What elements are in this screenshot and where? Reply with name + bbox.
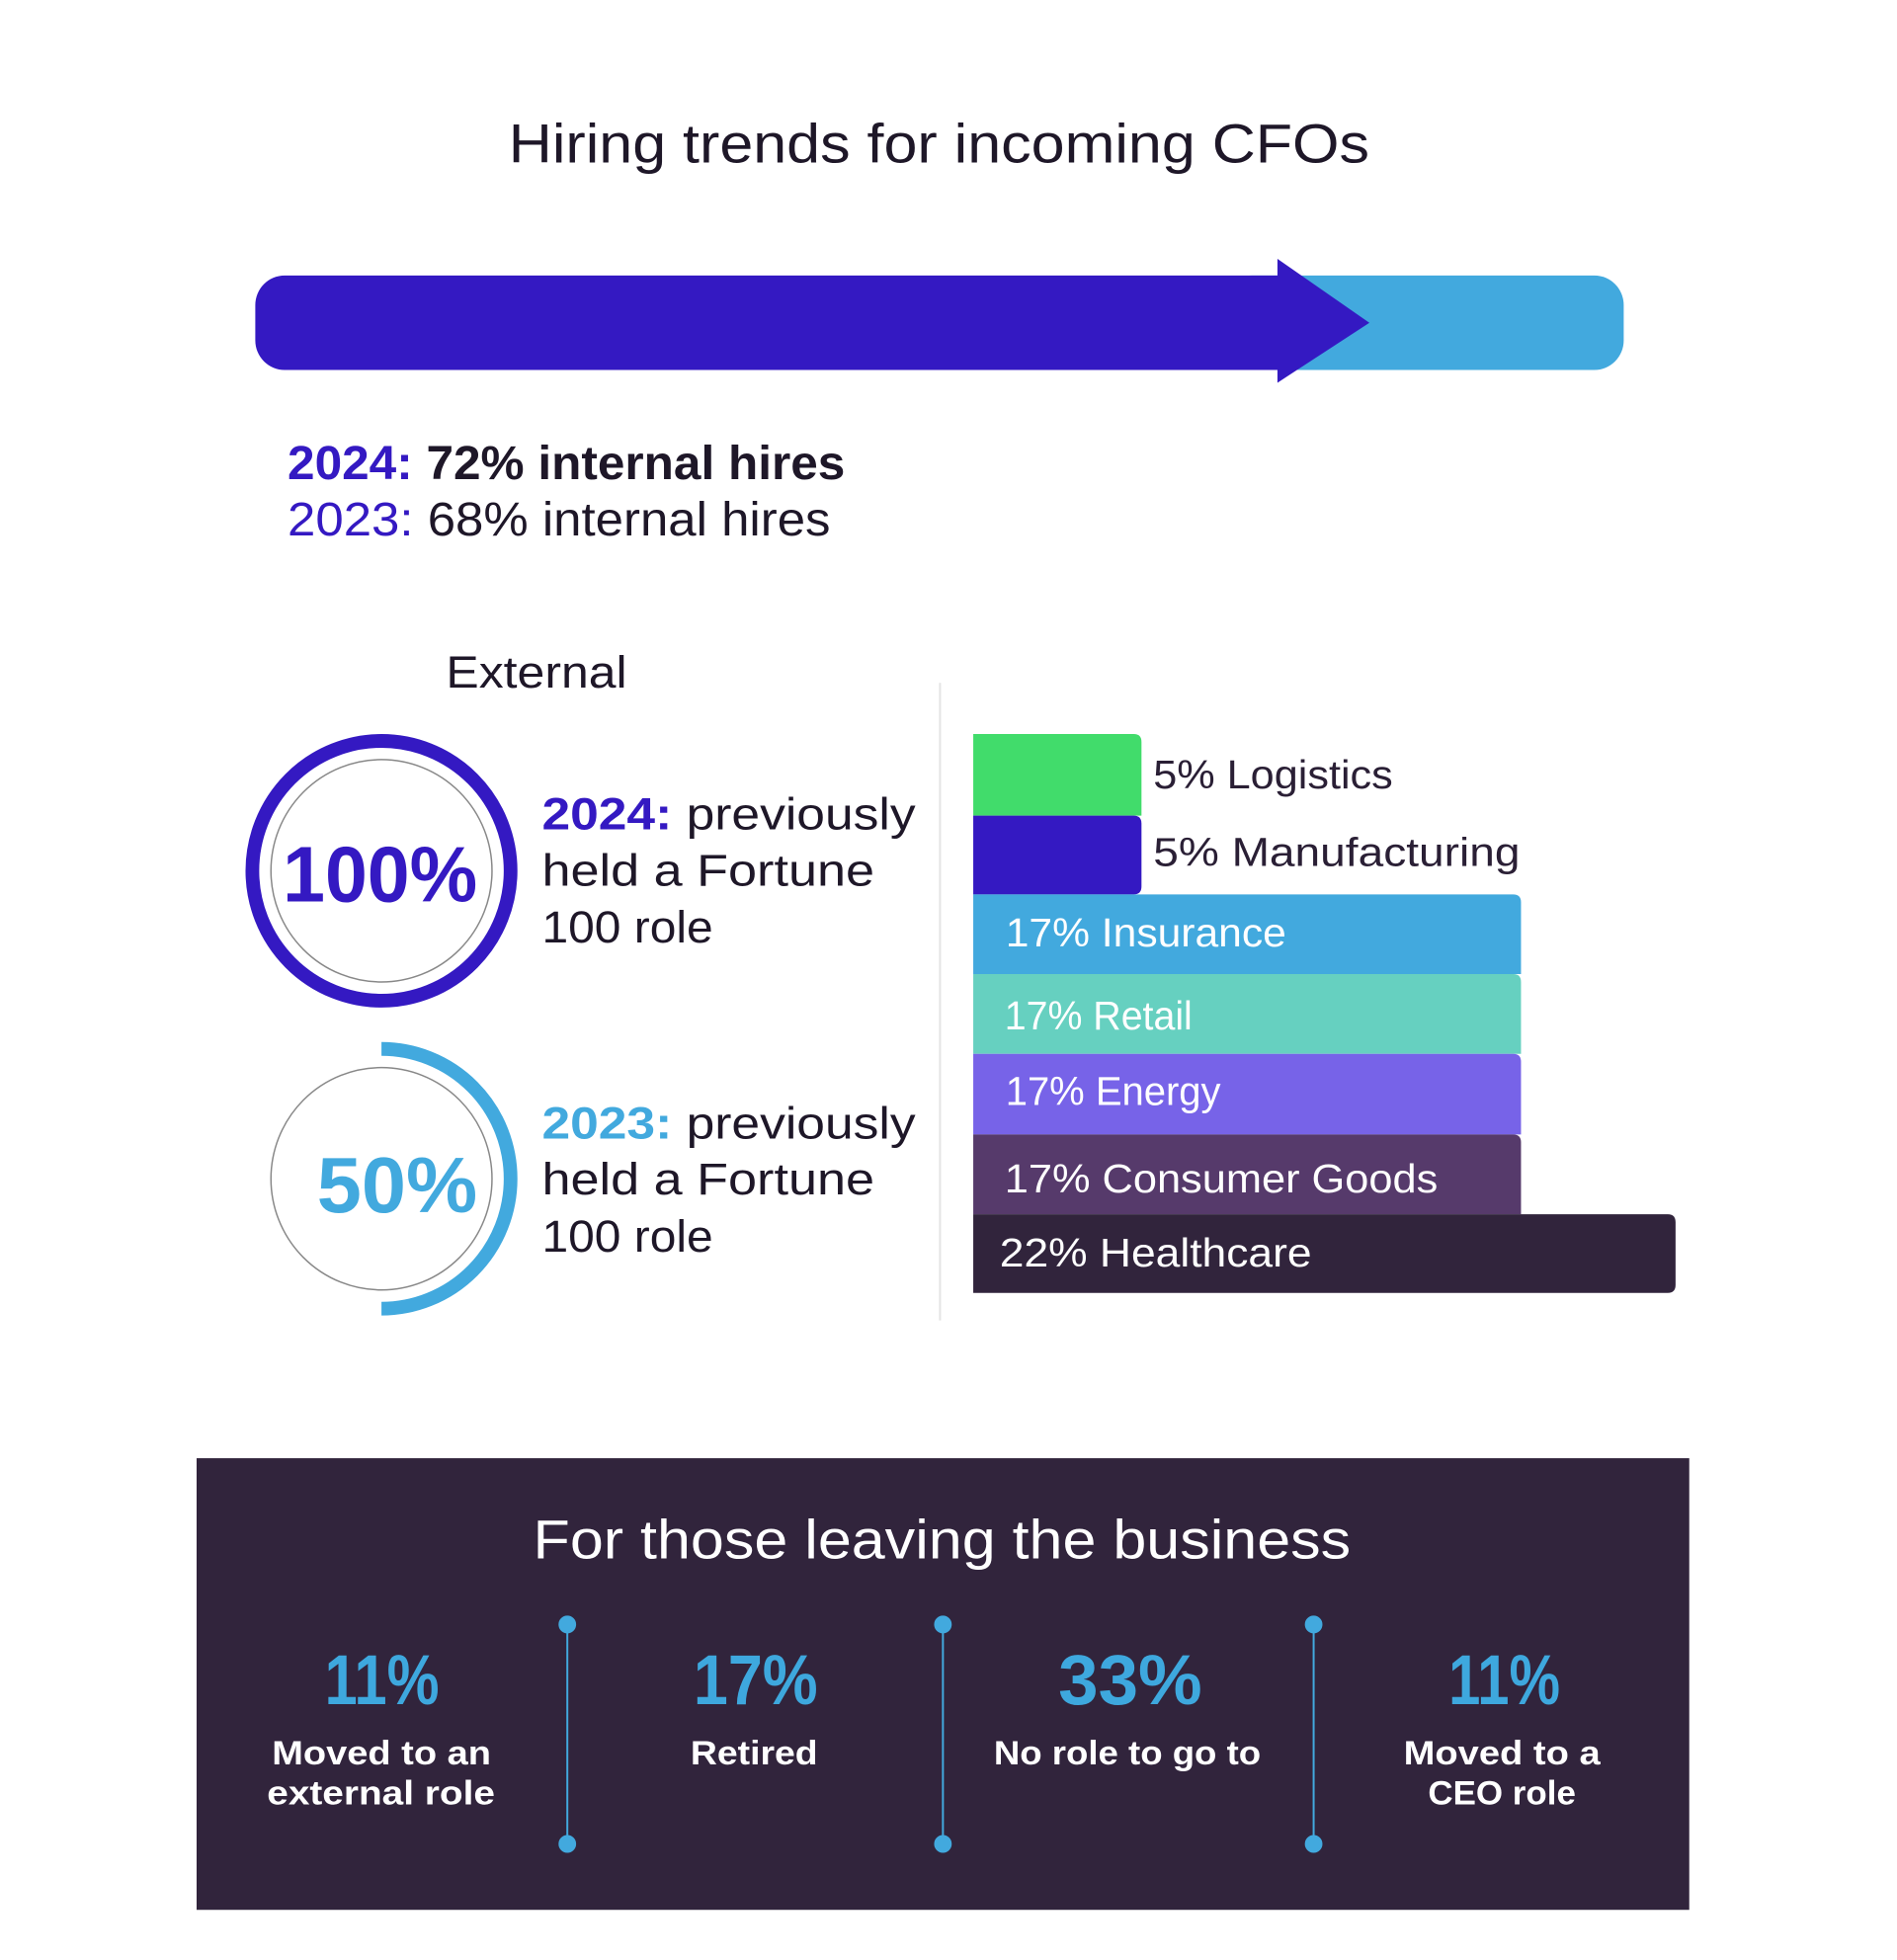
stat: no role: No role to go to [994,1735,1261,1772]
text: 2024 fortune 100 [541,789,916,952]
stat: external role: external role [267,1775,495,1813]
stat: no role [994,1641,1261,1772]
text: 2023 fortune 100: held a Fortune [541,1154,874,1204]
bar: consumer goods [973,1134,1521,1214]
stat: CEO role [1404,1641,1601,1813]
progress arrow bar [255,259,1623,382]
text: 2024 fortune 100: held a Fortune [541,845,874,895]
circle: 50% 2023: 50% [317,1141,477,1229]
stat: retired: 17% [694,1641,818,1720]
bar: healthcare [973,1214,1676,1293]
bar: retail: 17% Retail [1005,993,1193,1038]
text: 2023 fortune 100 [541,1098,916,1262]
bar: healthcare: 22% Healthcare [1000,1230,1312,1275]
bar: insurance: 17% Insurance [1006,910,1286,955]
bar: logistics [973,734,1393,816]
stat: retired: Retired [691,1735,818,1772]
bar: energy: 17% Energy [1006,1068,1221,1114]
industry bar chart [973,734,1676,1293]
stat: retired [691,1641,818,1772]
bar: manufacturing: 5% Manufacturing [1153,829,1520,875]
bar: consumer goods: 17% Consumer Goods [1005,1156,1438,1201]
internal hires stats: 2024: 72% internal hires [288,438,845,490]
text: 2024 fortune 100: 2024: previously [541,789,916,840]
stat: external role: 11% [325,1641,440,1720]
panel heading: For those leaving the business [534,1510,1351,1571]
infographic content [197,113,1690,1910]
bar: retail [973,974,1521,1054]
title: Hiring trends for incoming CFOs [509,113,1369,174]
circle: 100% 2024: 100% [283,830,477,918]
internal hires stats [288,438,845,546]
bar: manufacturing [973,816,1520,894]
stat: no role: 33% [1058,1641,1202,1720]
stat: external role [267,1641,495,1813]
stat: external role: Moved to an [272,1735,491,1772]
text: 2024 fortune 100: 100 role [541,902,713,952]
bar: insurance [973,894,1521,974]
text: 2023 fortune 100: 100 role [541,1211,713,1262]
stat: CEO role: 11% [1448,1641,1560,1720]
bar: logistics: 5% Logistics [1153,752,1393,797]
bar: energy [973,1054,1521,1134]
internal hires stats: 2023: 68% internal hires [288,494,831,546]
text: 2023 fortune 100: 2023: previously [541,1098,916,1148]
External heading: External [446,647,627,697]
stat: CEO role: Moved to a [1404,1735,1601,1772]
circle: 100% 2024 [252,741,511,1001]
circle: 50% 2023 [271,1049,511,1309]
stat: CEO role: CEO role [1428,1775,1576,1813]
panel: leaving the business [197,1458,1690,1910]
